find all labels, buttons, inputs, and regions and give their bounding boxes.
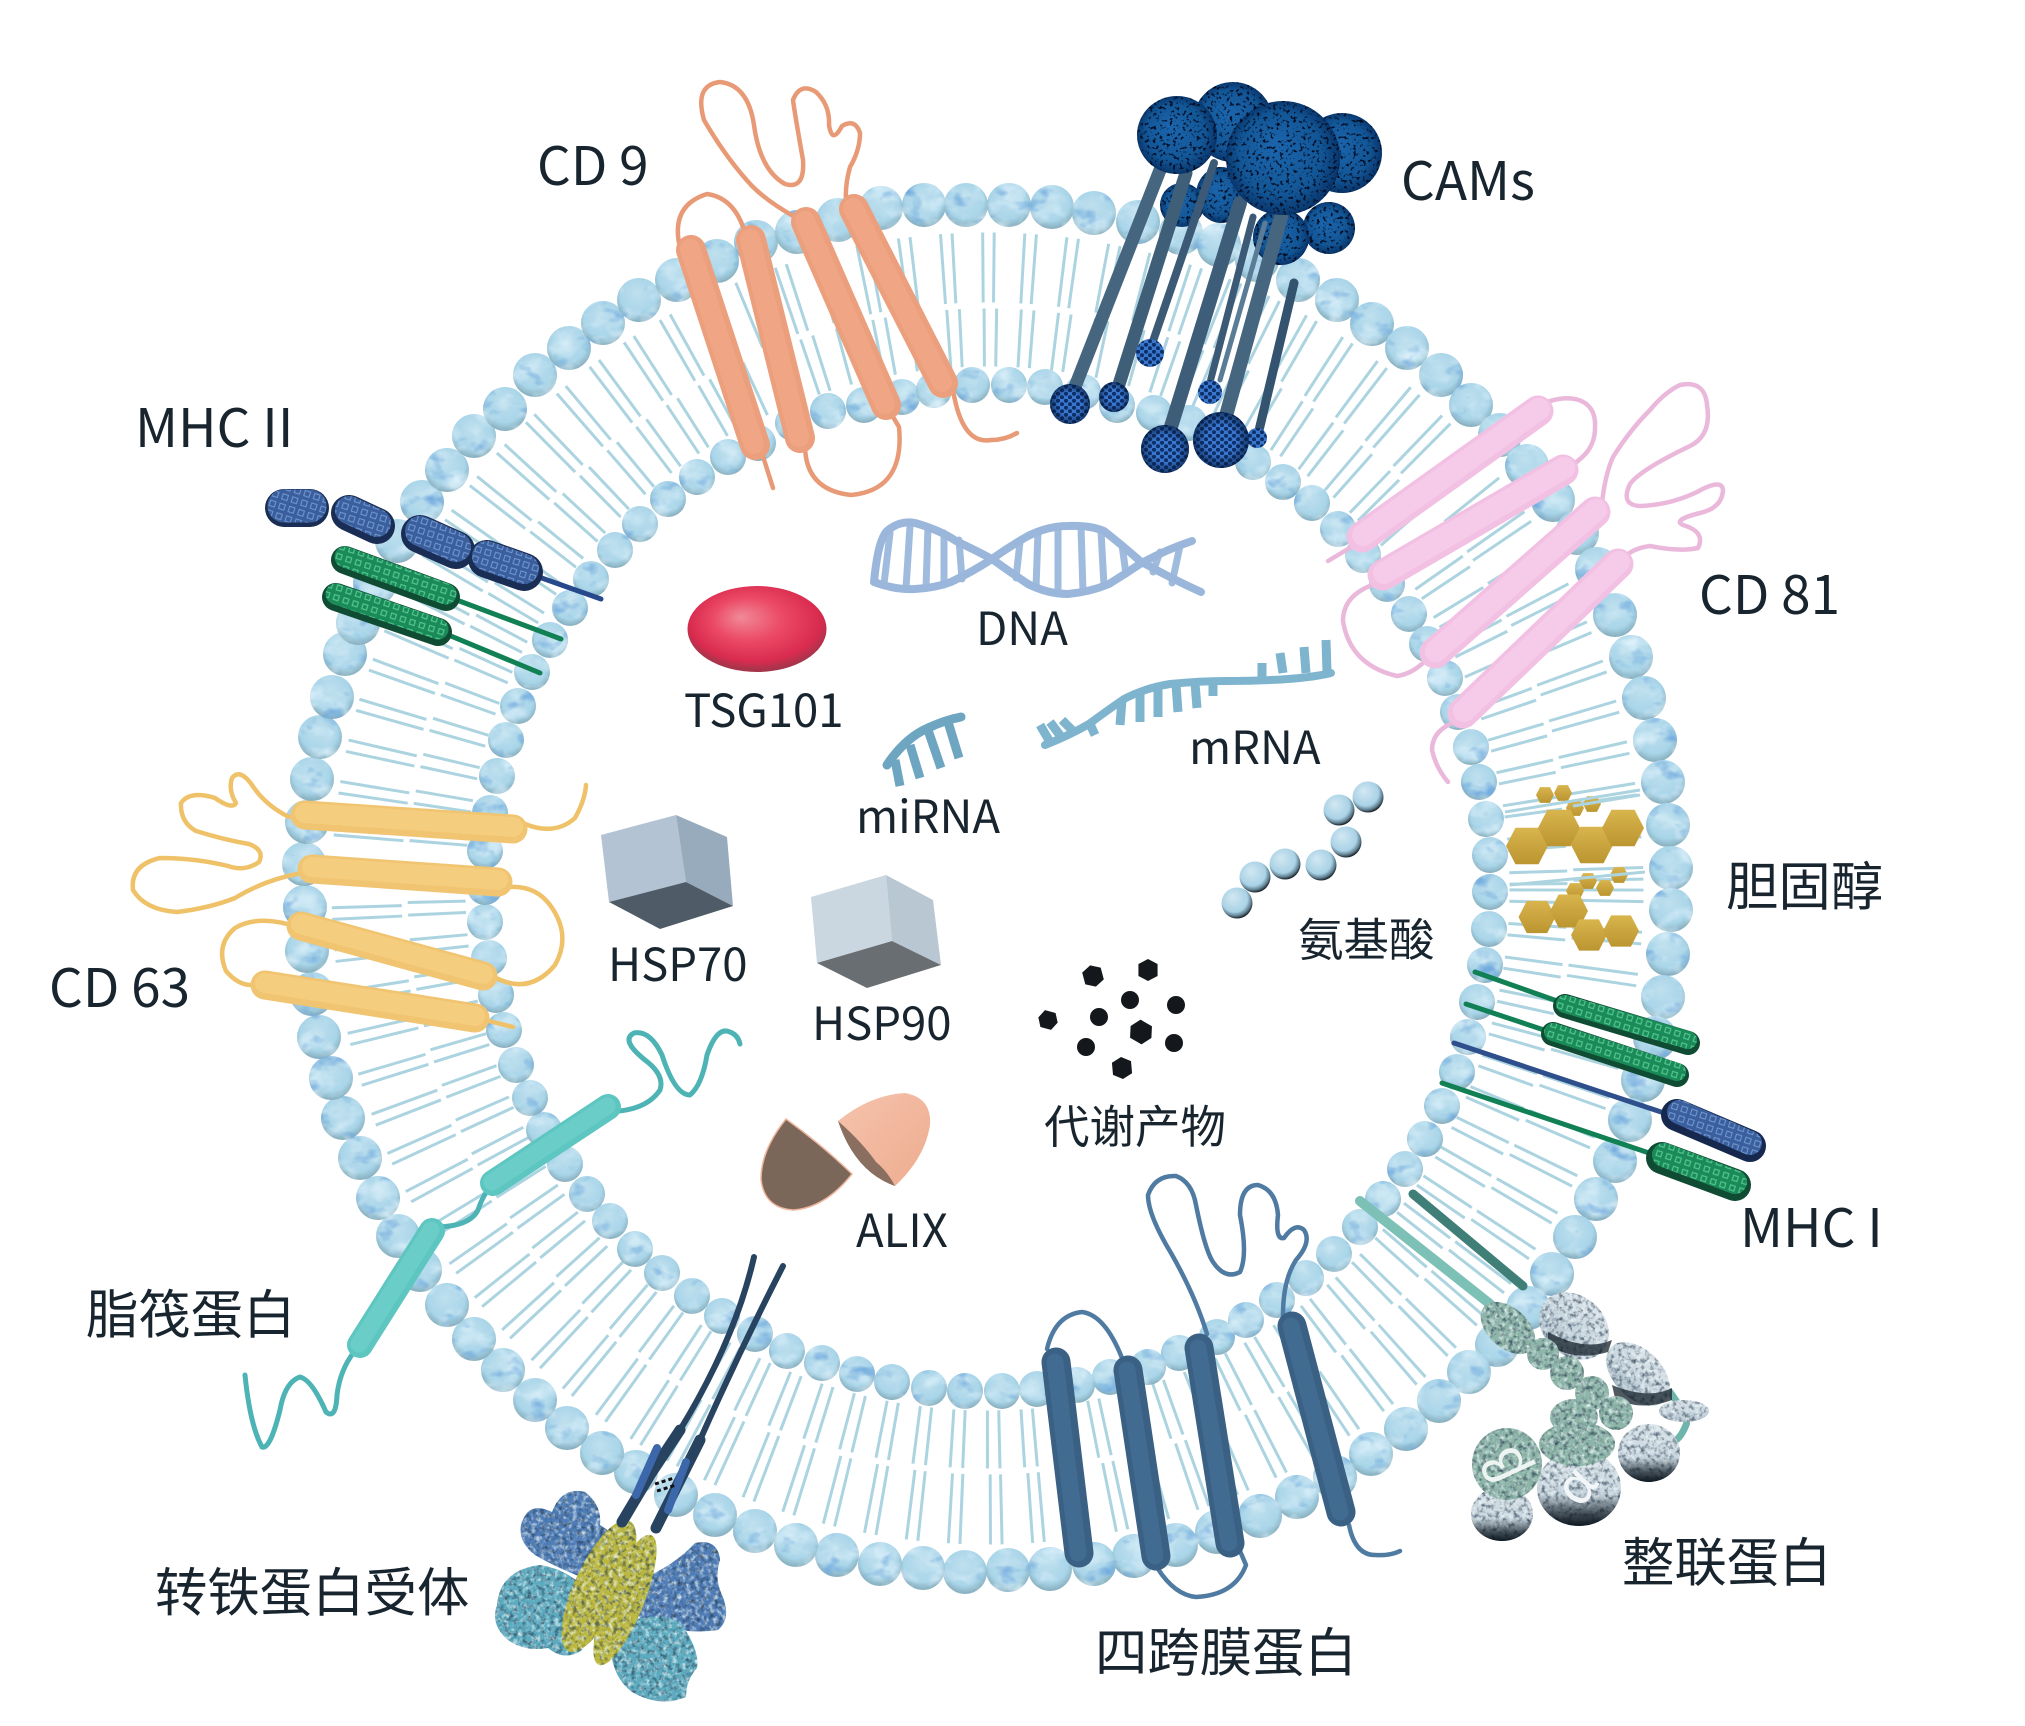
tetraspanin helices [1056, 1326, 1341, 1556]
label: 转铁蛋白受体: 转铁蛋白受体 [155, 1551, 469, 1627]
label: MHC II: MHC II [135, 387, 293, 463]
tetraspanin helix highlights [1055, 1326, 1340, 1556]
CAMs stems [1071, 163, 1294, 443]
miRNA backbone [887, 717, 961, 765]
receptor disulfide bridge [655, 1478, 676, 1491]
label: HSP70: HSP70 [608, 929, 748, 995]
integrin white domains [1471, 1279, 1709, 1541]
protein: MHC I [1442, 972, 1750, 1185]
label: CD 9: CD 9 [537, 125, 649, 201]
lipid bilayer heads [282, 183, 1693, 1594]
CD 81 loops [1328, 384, 1723, 782]
cargo icon: HSP90 cube [811, 875, 941, 988]
label: 脂筏蛋白: 脂筏蛋白 [86, 1273, 296, 1349]
label: TSG101: TSG101 [684, 675, 843, 741]
receptor yellow domains [547, 1511, 669, 1672]
MHC II green bars [336, 560, 446, 632]
inner leaflet heads [467, 367, 1508, 1409]
cargo icon: DNA [874, 522, 1201, 594]
label: miRNA: miRNA [856, 781, 1000, 847]
receptor stalk highlights [636, 1448, 686, 1510]
receptor dark stalks [622, 1257, 783, 1528]
mRNA backbone [1045, 673, 1331, 745]
CD 63 helices [265, 815, 513, 1018]
CAMs ball shading [1050, 382, 1249, 473]
label: DNA: DNA [976, 593, 1068, 659]
CD 81 helix highlights [1363, 409, 1619, 711]
ALIX right half [838, 1093, 930, 1186]
cargo icon: miRNA [887, 717, 961, 786]
protein: 整联蛋白 (integrin) [1360, 1194, 1709, 1541]
cargo icon: mRNA [1040, 640, 1331, 745]
flotillin bars [360, 1107, 608, 1345]
MHC II green pattern [336, 557, 446, 629]
cargo icon: amino acid chain [1222, 782, 1384, 918]
receptor teal lobes [495, 1565, 697, 1701]
protein: CD 81 [1328, 384, 1723, 782]
outer leaflet heads [282, 183, 1693, 1594]
cholesterol small rings [1536, 785, 1628, 899]
lipid bilayer tails [366, 268, 1608, 1510]
label: 代谢产物: 代谢产物 [1044, 1091, 1226, 1157]
DNA strands [874, 522, 1201, 594]
label: CD 81: CD 81 [1699, 554, 1840, 630]
integrin beta glyph: β [1460, 1436, 1542, 1497]
MHC II blue segments [284, 508, 524, 572]
CAMs spheres [1137, 82, 1382, 215]
CD 9 helices [691, 209, 943, 445]
metabolite dots [1077, 991, 1185, 1056]
label: HSP90: HSP90 [812, 988, 952, 1054]
protein: CAMs [1050, 82, 1382, 473]
ALIX cut face [838, 1121, 895, 1186]
MHC II stems [446, 576, 601, 673]
MHC II blue segment pattern [284, 506, 524, 569]
label: MHC I: MHC I [1740, 1187, 1883, 1263]
CD 9 helix highlights [690, 208, 942, 444]
protein: MHC II [284, 506, 601, 673]
CAMs rear spheres [1160, 167, 1355, 265]
integrin alpha glyph: α [1532, 1448, 1612, 1518]
label: 氨基酸: 氨基酸 [1298, 904, 1435, 970]
label: 四跨膜蛋白: 四跨膜蛋白 [1095, 1611, 1357, 1687]
label: 整联蛋白: 整联蛋白 [1622, 1521, 1832, 1597]
label: CAMs: CAMs [1401, 140, 1535, 216]
MHC I stems [1442, 972, 1670, 1155]
protein: 四跨膜蛋白 (tetraspanin) [1047, 1176, 1400, 1597]
protein: 脂筏蛋白 (flotillin) [245, 1031, 740, 1447]
receptor blue lobes [521, 1491, 726, 1632]
MHC I bar bases [1553, 1006, 1750, 1185]
molecule: 胆固醇 (cholesterol) [1505, 785, 1645, 951]
flotillin bar highlights [359, 1106, 607, 1344]
CD 9 loops [678, 82, 1017, 495]
protein: CD 63 [133, 774, 586, 1027]
cargo icon: ALIX [761, 1093, 930, 1210]
lipid tails crossing cholesterol [1505, 790, 1645, 885]
cargo icon: metabolites [1036, 959, 1185, 1080]
CD 63 helix highlights [265, 813, 513, 1016]
label: mRNA: mRNA [1189, 712, 1321, 778]
label: 胆固醇: 胆固醇 [1726, 845, 1883, 921]
ALIX left half [761, 1119, 852, 1210]
CD 81 helices [1362, 411, 1618, 713]
CD 63 loops [133, 774, 586, 1027]
metabolite polyhedra [1036, 959, 1158, 1080]
label: ALIX: ALIX [856, 1195, 948, 1261]
cholesterol large rings [1506, 810, 1644, 951]
tetraspanin loops [1047, 1176, 1400, 1597]
protein: 转铁蛋白受体 (transferrin receptor) [495, 1257, 783, 1701]
label: CD 63: CD 63 [49, 947, 190, 1023]
cargo icon: TSG101 [688, 586, 826, 672]
DNA rungs [884, 526, 1180, 592]
flotillin loops [245, 1031, 740, 1447]
protein: CD 9 [678, 82, 1017, 495]
integrin green domains [1471, 1292, 1633, 1500]
miRNA bases [895, 722, 959, 786]
CAMs small hollow balls [1050, 339, 1267, 473]
integrin rods [1360, 1194, 1687, 1442]
mRNA bases [1040, 640, 1327, 742]
MHC I bar patterns [1553, 1004, 1750, 1182]
integrin white domain bottom shading [1471, 1332, 1680, 1541]
cargo icon: HSP70 cube [601, 815, 733, 929]
